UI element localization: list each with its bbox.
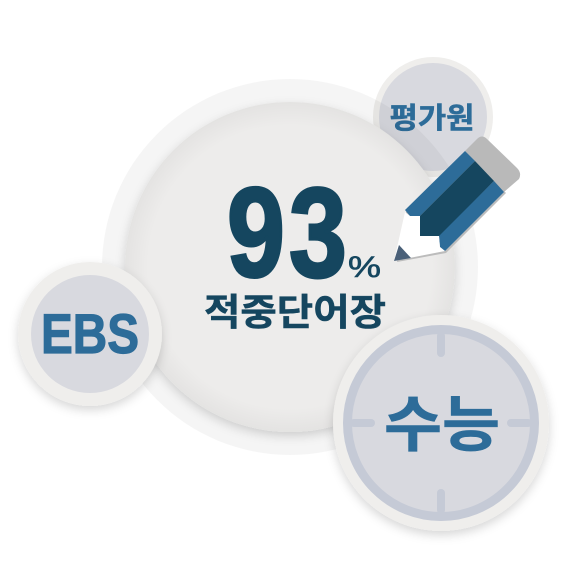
target ticks bbox=[354, 336, 528, 510]
headline: 93%: 93 bbox=[227, 162, 351, 304]
icon: pencil bbox=[394, 136, 520, 262]
headline: 93%: % bbox=[348, 251, 381, 284]
circle: 수능 target: 수능 bbox=[384, 392, 500, 459]
subtitle: 적중단어장: 적중단어장 bbox=[204, 292, 386, 333]
circle: 수능 target bbox=[333, 315, 549, 531]
circle: EBS: EBS bbox=[41, 302, 139, 365]
main circle: outer halo and inner disc bbox=[102, 79, 478, 455]
circle: EBS bbox=[18, 262, 162, 406]
circle: 평가원 bbox=[373, 57, 493, 177]
circle: 평가원: 평가원 bbox=[390, 102, 474, 135]
